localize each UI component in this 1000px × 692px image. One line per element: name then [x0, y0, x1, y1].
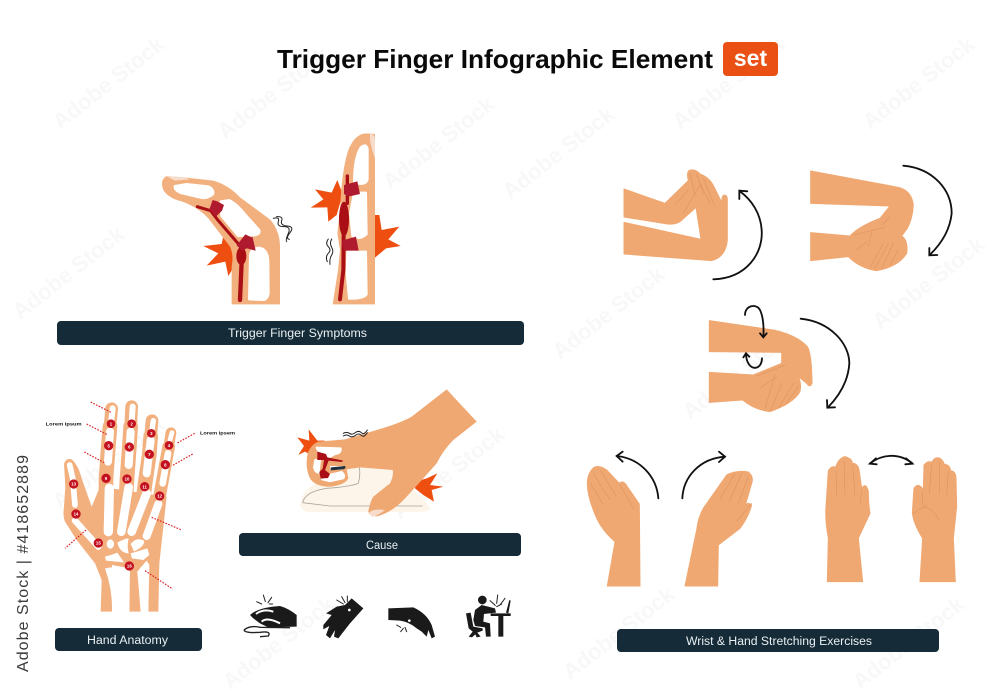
numbered markers: 11: [142, 484, 148, 489]
icon: hand on mouse: [244, 595, 297, 637]
watermark pattern: Adobe Stock: [558, 581, 680, 684]
numbered markers: 6: [128, 445, 131, 450]
pain bursts: [297, 429, 325, 455]
exercise 6: palm back of hand: [826, 456, 912, 582]
straight finger diagram: [311, 133, 401, 304]
label: Trigger Finger Symptoms: [57, 321, 524, 345]
label: Wrist & Hand Stretching Exercises: Wrist & Hand Stretching Exercises: [686, 636, 872, 648]
numbered markers: 5: [107, 443, 110, 448]
panel: hand anatomy: [46, 402, 236, 612]
numbered markers: 7: [148, 452, 151, 457]
hand silhouette: [64, 407, 171, 612]
numbered markers: 13: [71, 482, 77, 487]
red leader lines: [65, 402, 195, 589]
watermark pattern: Adobe Stock: [678, 321, 800, 424]
hand pressing mouse: [307, 389, 477, 516]
icon: glove hand: [323, 596, 363, 638]
carpal bones: [105, 538, 149, 562]
icon: bent wrist hand: [388, 607, 435, 638]
exercise 5: right hand tilt: [682, 452, 752, 586]
watermark pattern: Adobe Stock: [8, 221, 130, 324]
watermark pattern: Adobe Stock: [48, 31, 170, 134]
hand bones: [70, 407, 172, 547]
watermark pattern: Adobe Stock: [388, 421, 510, 524]
label: Cause: Cause: [366, 540, 398, 552]
watermark pattern: Adobe Stock: [218, 591, 340, 692]
exercise 7: palm front of hand: [912, 458, 957, 582]
numbered markers: 16: [127, 564, 132, 569]
numbered markers: 12: [157, 494, 163, 499]
label: Wrist & Hand Stretching Exercises: [617, 629, 939, 652]
numbered markers: 10: [125, 477, 130, 482]
numbered markers: 3: [150, 431, 153, 436]
watermark pattern: Adobe Stock: [868, 231, 990, 334]
watermark pattern: Adobe Stock: [858, 31, 980, 134]
watermark pattern: Adobe Stock: [548, 261, 670, 364]
numbered markers: 2: [130, 421, 133, 426]
icons row: [244, 595, 511, 638]
vibration marks: [343, 430, 367, 437]
exercise 2: hand pull down: [811, 166, 952, 271]
label: Hand Anatomy: [55, 628, 202, 651]
numbered markers: 15: [96, 541, 101, 546]
forearm gaps: [105, 561, 149, 612]
bent finger diagram: [162, 176, 292, 304]
watermark pattern: Adobe Stock: [48, 411, 170, 514]
exercise 1: palm pull up: [624, 170, 762, 279]
exercise 3: wrist twist stretch: [709, 306, 849, 412]
numbered markers: [69, 419, 173, 571]
title: set: [734, 45, 767, 71]
finger bones and tendon: [314, 448, 346, 481]
panel: cause illustration: [297, 389, 477, 517]
label: Trigger Finger Symptoms: Trigger Finger Symptoms: [228, 328, 367, 340]
watermark pattern: Adobe Stock: [668, 31, 790, 134]
panel: wrist stretch exercises: [624, 166, 952, 412]
numbered markers: 4: [168, 443, 171, 448]
numbered markers: 8: [164, 462, 167, 467]
callout labels: Lorem Ipsem: [200, 430, 236, 436]
label: Cause: [239, 533, 521, 556]
label: Hand Anatomy: Hand Anatomy: [87, 635, 168, 647]
watermark pattern: Adobe Stock: [848, 591, 970, 692]
numbered markers: 14: [74, 512, 79, 517]
title: Trigger Finger Infographic Element: [277, 44, 713, 74]
watermark pattern: Adobe Stock: [213, 41, 335, 144]
numbered markers: 1: [110, 421, 113, 426]
watermark pattern: Adobe Stock: [498, 101, 620, 204]
watermark pattern: Adobe Stock: [378, 91, 500, 194]
panel: trigger finger symptoms: [162, 133, 401, 304]
callout labels: [46, 421, 236, 436]
stock side label: Adobe Stock | #418652889: [15, 455, 32, 672]
exercise 4: left hand tilt: [587, 452, 658, 586]
panel: hand flexion and rotation exercises: [587, 452, 957, 586]
mouse: [300, 466, 430, 512]
callout labels: Lorem Ipsum: [46, 421, 82, 427]
numbered markers: 9: [105, 476, 108, 481]
icon: person at desk: [466, 595, 511, 637]
